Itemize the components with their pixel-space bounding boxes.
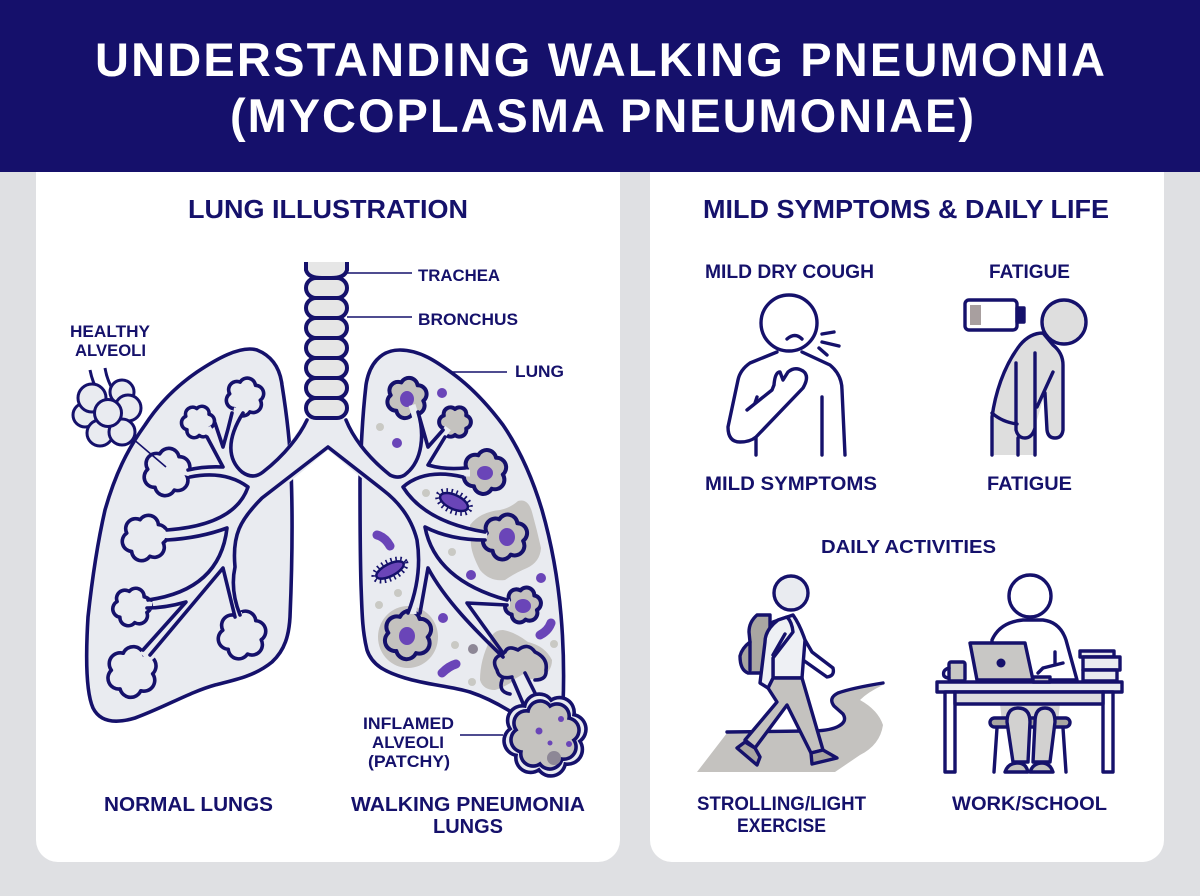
caption: walking pneumonia lungs [351, 794, 585, 838]
caption: walking pneumonia lungs: LUNGS [433, 816, 503, 838]
right airway branches [346, 412, 507, 657]
leader line: trachea [347, 272, 412, 274]
label: strolling / light exercise [697, 793, 866, 837]
stem openings [141, 408, 238, 660]
left airway branches [143, 413, 419, 655]
label: daily activities: DAILY ACTIVITIES [821, 536, 996, 557]
icon: fatigued person with low battery [965, 300, 1086, 455]
inflammation patches [378, 500, 552, 690]
label: strolling / light exercise: EXERCISE [737, 815, 826, 837]
purple nuclei [399, 391, 531, 645]
bacteria and particles [370, 388, 558, 686]
title [95, 33, 1105, 142]
label: healthy alveoli: HEALTHY [70, 323, 150, 341]
right inflamed clusters [383, 375, 545, 661]
left alveoli clusters [106, 375, 270, 699]
label: inflamed alveoli [363, 715, 454, 771]
left lung outline: normal [87, 349, 292, 721]
inflamed alveoli close-up [499, 689, 591, 781]
label: work / school: WORK/SCHOOL [952, 793, 1107, 815]
icon: person working at desk [937, 575, 1122, 772]
label: fatigue caption: FATIGUE [987, 474, 1072, 495]
right lung outline: walking pneumonia [360, 350, 564, 713]
pointer: healthy alveoli [132, 438, 166, 467]
panel: mild symptoms and daily life [650, 150, 1164, 862]
label: strolling / light exercise: STROLLING/LIGHT [697, 793, 866, 815]
label: inflamed alveoli: INFLAMED [363, 715, 454, 733]
label: fatigue: FATIGUE [989, 262, 1070, 283]
label: lung: LUNG [515, 363, 564, 381]
label: inflamed alveoli: (PATCHY) [368, 753, 450, 771]
icon: coughing person [728, 295, 845, 455]
label: inflamed alveoli: ALVEOLI [372, 734, 444, 752]
healthy alveoli close-up [73, 368, 141, 446]
caption: walking pneumonia lungs: WALKING PNEUMONIA [351, 794, 585, 816]
title: (MYCOPLASMA PNEUMONIAE) [230, 89, 974, 142]
label: healthy alveoli: ALVEOLI [75, 342, 146, 360]
label: mild symptoms: MILD SYMPTOMS [705, 474, 877, 495]
panel: lung illustration [36, 150, 620, 862]
header banner [0, 0, 1200, 172]
heading: lung illustration: LUNG ILLUSTRATION [188, 194, 468, 224]
title: UNDERSTANDING WALKING PNEUMONIA [95, 33, 1105, 86]
label: trachea: TRACHEA [418, 267, 500, 285]
leader line: inflamed alveoli [460, 734, 503, 736]
label: mild dry cough: MILD DRY COUGH [705, 262, 874, 283]
heading: mild symptoms and daily life: MILD SYMPTOMS & DAILY LIFE [703, 194, 1109, 224]
leader line: bronchus [347, 316, 412, 318]
caption: normal lungs: NORMAL LUNGS [104, 794, 273, 816]
trachea and bronchus [255, 262, 400, 490]
label: healthy alveoli [70, 323, 150, 360]
icon: person strolling on path [697, 576, 883, 772]
leader line: lung [450, 371, 507, 373]
label: bronchus: BRONCHUS [418, 311, 518, 329]
partial inflamed cluster and stem [495, 646, 546, 708]
